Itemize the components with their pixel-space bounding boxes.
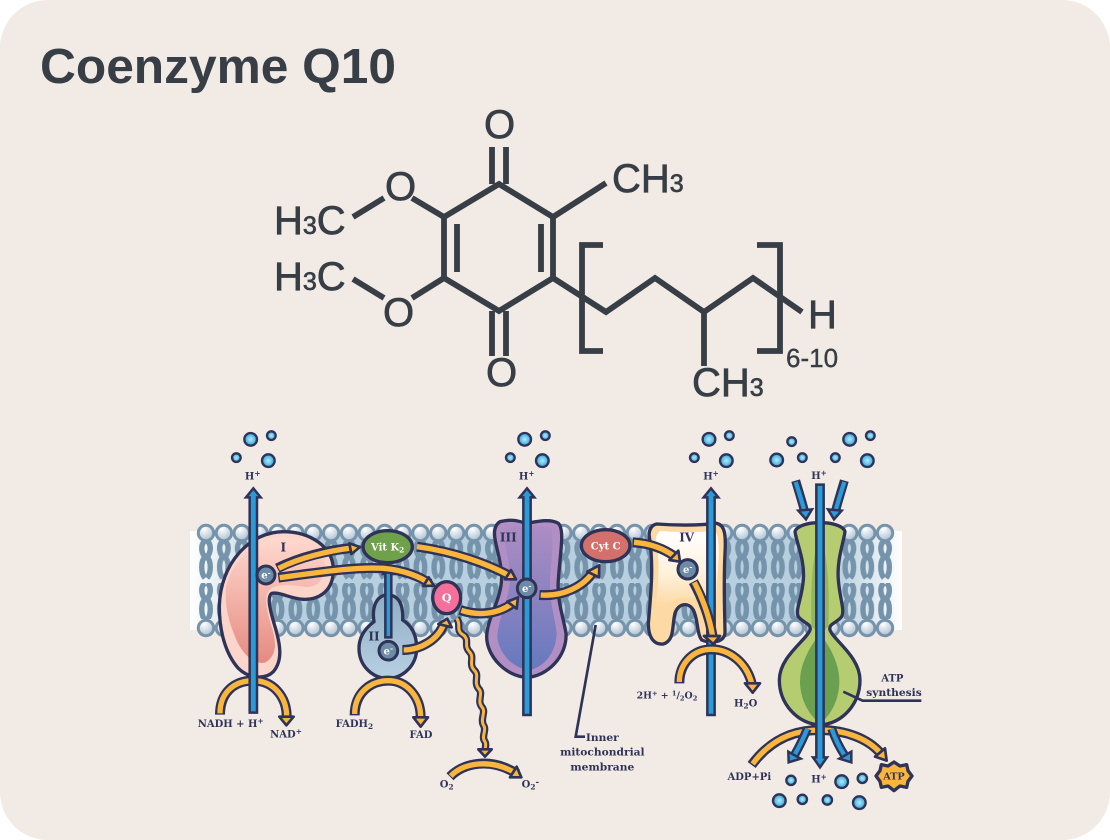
protons above ATP synthase	[770, 431, 875, 467]
arrow: Cyt C to complex IV	[633, 542, 680, 562]
label NADH + H+: NADH + H	[198, 719, 257, 730]
complex III protein: III	[500, 531, 517, 545]
Q	[433, 582, 461, 614]
label: inner mitochondrial membrane: membrane	[570, 760, 634, 773]
chemical structure of coenzyme Q10: H3C	[274, 255, 346, 299]
label NAD+: NAD	[270, 729, 296, 740]
label: inner mitochondrial membrane: Inner	[586, 731, 619, 744]
electron, complex IV	[678, 560, 697, 579]
proton arrow, top right	[828, 481, 844, 519]
Q: Q	[442, 591, 452, 605]
label 2H+ + 1/2 O2: +	[652, 689, 658, 697]
label H2O: O	[749, 698, 758, 709]
label 2H+ + 1/2 O2: +	[658, 691, 672, 702]
complex IV protein	[648, 523, 725, 644]
complex II protein: II	[368, 629, 380, 643]
electron, complex III: -	[528, 582, 531, 591]
label H+: +	[821, 772, 827, 781]
electron, complex II: -	[390, 644, 393, 653]
electron, complex III	[517, 579, 536, 598]
label H+: +	[821, 469, 827, 478]
electron, complex I: -	[268, 568, 271, 577]
proton arrow, top left	[796, 481, 812, 519]
label FADH2: FADH	[336, 719, 368, 730]
electron, complex I	[257, 566, 275, 584]
electron, complex II	[379, 641, 398, 660]
protons above complex III	[506, 431, 550, 467]
label: inner mitochondrial membrane: mitochondrial	[560, 746, 645, 759]
electron, complex II: e	[384, 646, 390, 657]
label H+: H	[811, 775, 821, 786]
chemical structure of coenzyme Q10: O	[486, 351, 517, 395]
electron, complex III: e	[522, 584, 528, 595]
proton arrow through complex IV	[704, 488, 718, 715]
label H+: +	[254, 469, 260, 478]
complex I protein	[219, 532, 333, 677]
proton arrow from complex II	[383, 568, 393, 637]
label FAD: FAD	[410, 730, 433, 741]
label H+: H	[519, 471, 528, 482]
complex I protein: I	[281, 541, 287, 555]
label NADH + H+: +	[257, 717, 264, 726]
ATP badge: ATP	[882, 772, 905, 783]
Vit K2: Vit K	[371, 542, 399, 553]
protons above complex IV	[690, 431, 734, 467]
protons above complex I	[232, 431, 276, 467]
label ADP+Pi: ADP+Pi	[727, 772, 771, 783]
proton arrow through complex III	[520, 488, 534, 715]
label H2O: 2	[743, 701, 749, 710]
ATP synthase protein	[779, 523, 860, 725]
label H+: H	[811, 471, 821, 482]
complex IV protein: IV	[679, 531, 695, 545]
Vit K2	[363, 531, 412, 563]
arrow: oxygen reduction arc	[679, 649, 760, 693]
chemical structure of coenzyme Q10	[274, 103, 838, 405]
arrow: complex III to Cyt C	[539, 565, 599, 595]
arrow: complex I to Vit K2	[277, 543, 360, 568]
chemical structure of coenzyme Q10: CH3	[692, 361, 764, 405]
chemical structure of coenzyme Q10: CH3	[612, 157, 684, 201]
label H2O: H	[734, 698, 743, 709]
label NAD+: +	[296, 727, 302, 736]
arrow: Q to complex III	[460, 597, 518, 614]
label FADH2: 2	[368, 722, 373, 731]
inner mitochondrial membrane	[190, 525, 902, 636]
proton arrow, bottom left	[788, 729, 807, 762]
chemical structure of coenzyme Q10: O	[383, 291, 414, 335]
label 2H+ + 1/2 O2: 2	[693, 695, 698, 703]
label H+: H	[703, 471, 713, 482]
electron, complex IV: e	[683, 565, 689, 576]
arrow: complex II to Q	[402, 619, 452, 650]
middle section: Q, complex III, Cyt C, complex IV	[417, 431, 760, 792]
Cyt C: Cyt C	[591, 541, 621, 552]
Vit K2: 2	[399, 545, 404, 554]
chemical structure of coenzyme Q10: 6-10	[786, 343, 838, 373]
chemical structure of coenzyme Q10: H3C	[274, 199, 346, 243]
Cyt C	[581, 530, 630, 562]
label O2: O	[440, 780, 448, 791]
label H+: +	[713, 469, 719, 478]
arrow: ADP+Pi to ATP	[752, 730, 887, 765]
title: Coenzyme Q10	[40, 40, 396, 94]
label O2: 2	[448, 783, 454, 792]
chemical structure of coenzyme Q10: H	[808, 293, 837, 337]
wavy arrow: Q to superoxide	[457, 618, 492, 757]
central proton arrow	[813, 485, 827, 767]
arrow: Vit K2 to complex III	[417, 547, 516, 579]
label O2-: 2	[530, 783, 535, 792]
ATP badge	[876, 762, 912, 791]
complex II protein	[359, 595, 417, 678]
electron, complex IV: -	[689, 563, 692, 572]
left section: complexes I and II	[198, 431, 452, 741]
complex III protein	[487, 520, 566, 677]
label 2H+ + 1/2 O2: 1	[672, 689, 676, 697]
label H+: H	[245, 471, 254, 482]
label O2-: O	[522, 780, 530, 791]
proton arrow through complex I	[246, 488, 261, 713]
label: inner mitochondrial membrane	[560, 625, 645, 773]
label H+: +	[528, 469, 534, 478]
protons below ATP synthase	[773, 774, 867, 809]
label: ATP synthesis	[843, 673, 922, 701]
label 2H+ + 1/2 O2: 2	[680, 695, 685, 703]
label O2-: -	[535, 777, 539, 787]
chemical structure of coenzyme Q10: O	[385, 165, 416, 209]
arrow: FADH2 to FAD	[355, 681, 428, 727]
label 2H+ + 1/2 O2: O	[685, 691, 693, 702]
electron, complex I: e	[261, 571, 268, 582]
label 2H+ + 1/2 O2: 2H	[637, 691, 652, 702]
arrow: O2 to O2-	[450, 764, 521, 777]
label: ATP synthesis: ATP	[880, 673, 904, 684]
right section: ATP synthase	[727, 431, 922, 809]
label 2H+ + 1/2 O2: /	[676, 691, 680, 702]
label: ATP synthesis: synthesis	[866, 686, 922, 699]
proton arrow, bottom right	[832, 729, 851, 762]
arrow: complex I to Q	[278, 568, 434, 586]
arrow: electron to oxygen	[693, 582, 720, 644]
arrow: NADH to NAD+	[220, 681, 294, 725]
chemical structure of coenzyme Q10: O	[484, 103, 515, 147]
